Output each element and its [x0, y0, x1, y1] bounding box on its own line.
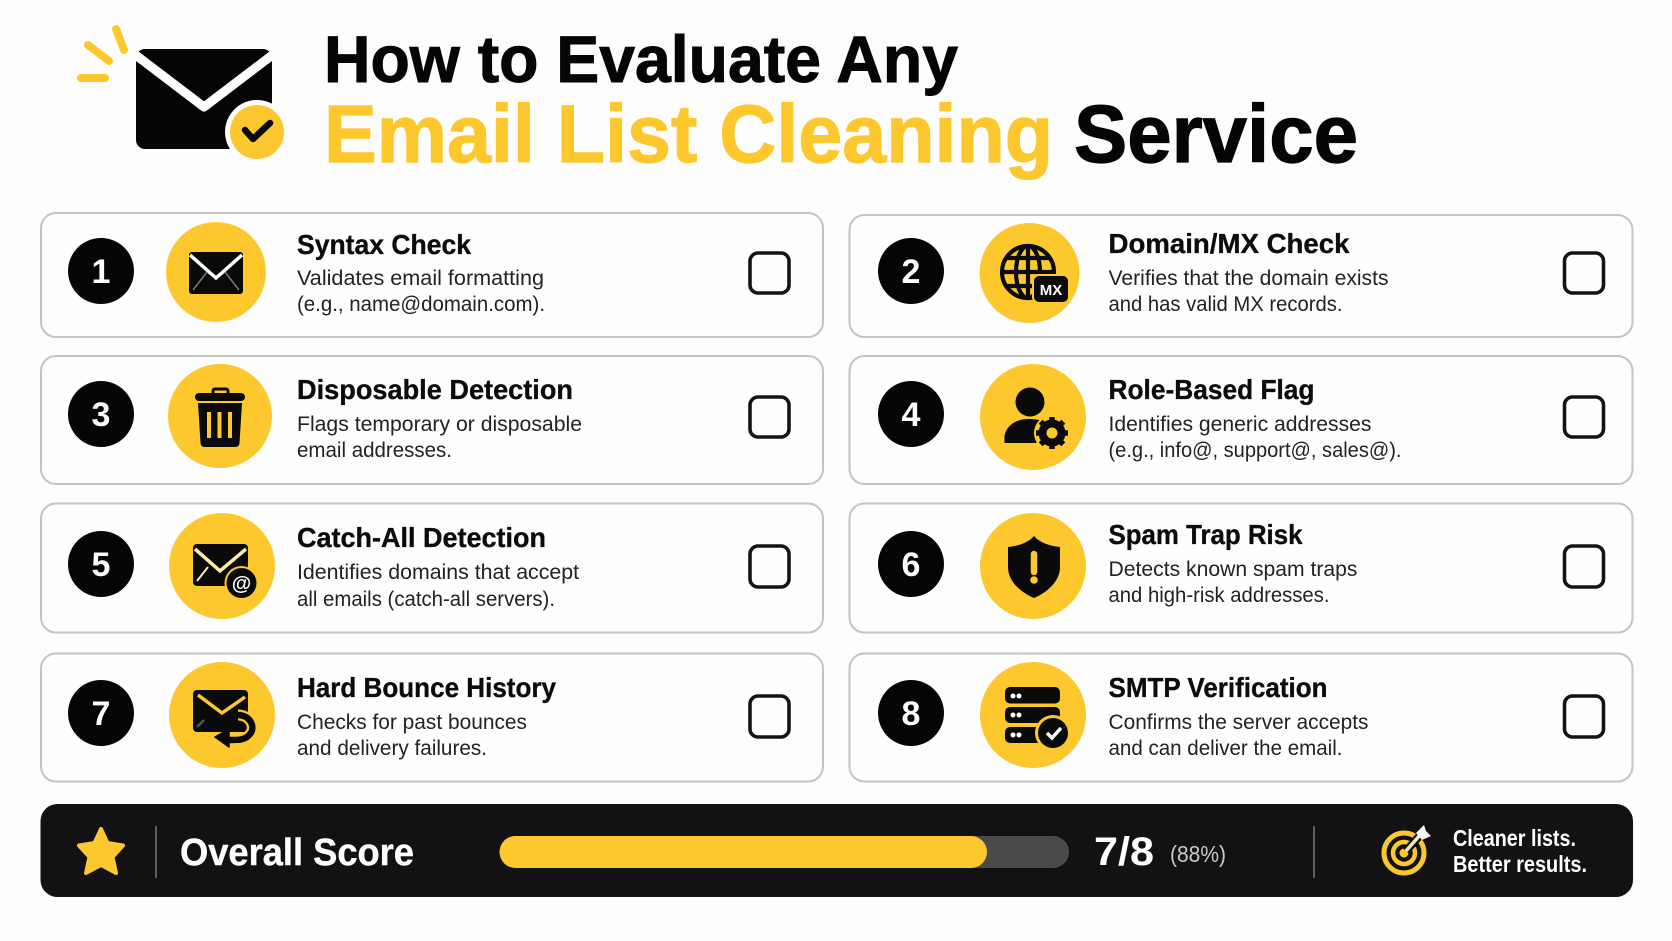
text: Domain/MX Check: and has valid MX records.	[1108, 293, 1342, 316]
icon: shield with exclamation	[980, 513, 1086, 619]
text: Syntax Check: (e.g., name@domain.com).	[297, 293, 545, 316]
text: Disposable Detection	[297, 374, 582, 462]
number badge 7	[68, 680, 134, 746]
icon: trash can	[168, 364, 272, 468]
text: Spam Trap Risk: Detects known spam traps	[1108, 558, 1358, 581]
number badge 2	[878, 238, 944, 304]
icon: envelope with at sign: @	[232, 573, 251, 595]
title	[324, 22, 1358, 180]
panel: 4 Role-Based Flag	[850, 356, 1632, 484]
number badge 6	[878, 531, 944, 597]
panel: 2 Domain/MX Check	[850, 215, 1632, 337]
text: Role-Based Flag: Identifies generic addresses	[1108, 413, 1372, 436]
number badge 1: 1	[92, 253, 110, 291]
icon: target with arrow	[1384, 825, 1431, 873]
text: Catch-All Detection: all emails (catch-all servers).	[297, 588, 555, 611]
panel: overall score bar	[40, 804, 1633, 897]
number badge 2: 2	[902, 253, 920, 291]
progress bar	[500, 836, 1069, 868]
number badge 8	[878, 680, 944, 746]
number badge 5	[68, 531, 134, 597]
checkbox	[750, 253, 789, 293]
score value	[1094, 830, 1226, 874]
number badge 3	[68, 381, 134, 447]
text: Catch-All Detection	[297, 522, 579, 611]
icon: envelope with at sign	[169, 513, 275, 619]
icon: envelope with return arrow	[169, 662, 275, 768]
title: Service	[1074, 89, 1358, 180]
header icon: envelope with check badge	[81, 29, 289, 164]
text: Role-Based Flag	[1108, 374, 1402, 462]
icon: star	[79, 829, 123, 873]
checkbox	[750, 696, 789, 737]
text: SMTP Verification: Confirms the server accepts	[1108, 711, 1368, 734]
score value: 7/8	[1094, 830, 1154, 874]
tagline: Cleaner lists.	[1453, 825, 1576, 851]
icon: globe with MX badge: MX	[1040, 282, 1062, 299]
number badge 8: 8	[902, 695, 920, 733]
text: Spam Trap Risk	[1108, 519, 1358, 607]
title: How to Evaluate Any	[324, 22, 958, 96]
text: Domain/MX Check	[1108, 228, 1388, 316]
checkbox	[1564, 696, 1604, 737]
tagline: Better results.	[1453, 851, 1587, 877]
checkbox	[1564, 397, 1604, 437]
text: Disposable Detection: email addresses.	[297, 439, 452, 462]
score label: Overall Score	[180, 832, 414, 874]
text: Catch-All Detection: Identifies domains that accept	[297, 561, 579, 584]
number badge 4: 4	[902, 396, 921, 434]
text: Catch-All Detection: Catch-All Detection	[297, 522, 546, 553]
text: Spam Trap Risk: Spam Trap Risk	[1108, 519, 1303, 550]
panel: 5 Catch-All Detection	[41, 504, 823, 632]
text: Hard Bounce History	[297, 672, 556, 760]
text: Hard Bounce History: Checks for past bounces	[297, 711, 527, 734]
number badge 4	[878, 381, 944, 447]
checkbox	[750, 546, 789, 587]
number badge 5: 5	[92, 546, 110, 584]
text: SMTP Verification: and can deliver the email.	[1108, 737, 1342, 760]
text: Syntax Check: Syntax Check	[297, 229, 471, 260]
panel: 7 Hard Bounce History	[41, 654, 823, 782]
number badge 1	[68, 238, 134, 304]
text: Syntax Check: Validates email formatting	[297, 267, 544, 290]
text: Hard Bounce History: and delivery failures.	[297, 737, 487, 760]
icon: envelope	[166, 222, 266, 322]
text: Role-Based Flag: (e.g., info@, support@, sales@).	[1108, 439, 1402, 462]
text: Hard Bounce History: Hard Bounce History	[297, 672, 556, 703]
checkbox	[750, 397, 789, 437]
checkbox	[1564, 253, 1604, 293]
icon: globe with MX badge	[980, 223, 1080, 323]
panel: 6 Spam Trap Risk	[850, 504, 1632, 632]
text: Role-Based Flag: Role-Based Flag	[1108, 374, 1314, 405]
text: Domain/MX Check: Domain/MX Check	[1108, 228, 1350, 259]
panel: 1 Syntax Check	[41, 213, 823, 337]
title: Email List Cleaning	[324, 89, 1053, 180]
panel: 8 SMTP Verification	[850, 654, 1632, 782]
number badge 6: 6	[902, 546, 920, 584]
icon: server with check	[980, 662, 1086, 768]
text: Disposable Detection: Flags temporary or disposable	[297, 413, 582, 436]
text: Disposable Detection: Disposable Detection	[297, 374, 573, 405]
score value: (88%)	[1170, 841, 1226, 867]
number badge 7: 7	[92, 695, 110, 733]
number badge 3: 3	[92, 396, 110, 434]
text: Syntax Check	[297, 229, 545, 316]
panel: 3 Disposable Detection	[41, 356, 823, 484]
tagline	[1453, 825, 1587, 877]
text: Spam Trap Risk: and high-risk addresses.	[1108, 584, 1330, 607]
text: Domain/MX Check: Verifies that the domain exists	[1108, 267, 1388, 290]
text: SMTP Verification	[1108, 672, 1368, 760]
icon: person with gear	[980, 364, 1086, 470]
text: SMTP Verification: SMTP Verification	[1108, 672, 1328, 703]
checkbox	[1564, 546, 1604, 587]
